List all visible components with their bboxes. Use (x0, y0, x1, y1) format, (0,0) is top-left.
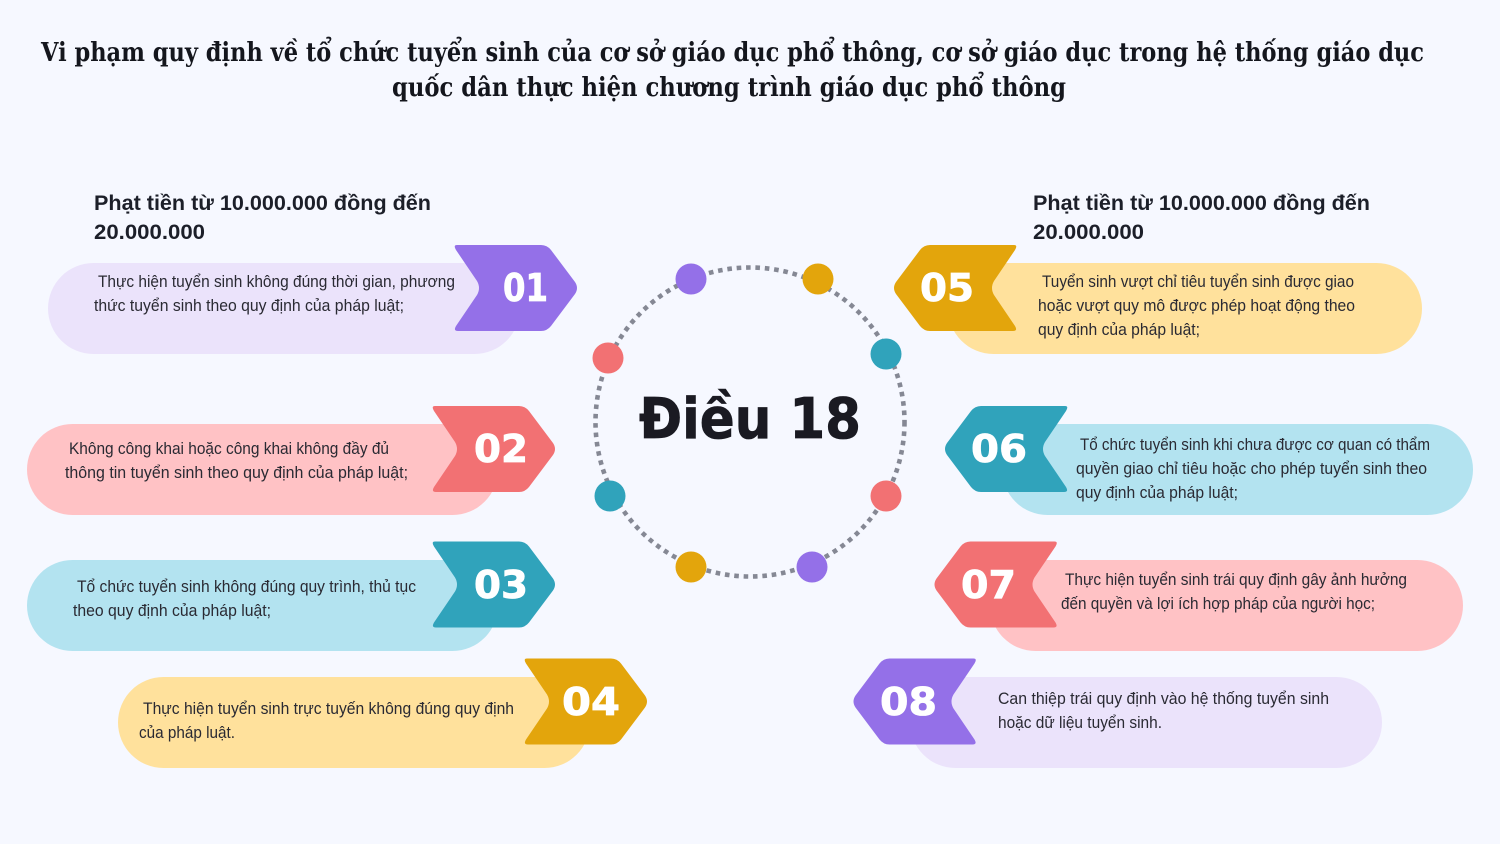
item 01: 01 (503, 266, 548, 310)
item 06: quy định của pháp luật; (1076, 483, 1238, 502)
item 05: quy định của pháp luật; (1038, 320, 1200, 339)
heading: left fine: 20.000.000 (94, 221, 205, 244)
title: quốc dân thực hiện chương trình giáo dục phổ thông (392, 71, 1066, 103)
item 05 (894, 245, 1422, 354)
item 06: quyền giao chỉ tiêu hoặc cho phép tuyển sinh theo (1076, 459, 1427, 478)
item 03 (27, 542, 555, 651)
item 01 (48, 245, 577, 354)
item 05: 05 (920, 266, 974, 310)
item 06: 06 (971, 427, 1027, 471)
item 04 (118, 658, 647, 768)
item 02: Không công khai hoặc công khai không đầy đủ (69, 439, 389, 458)
item 08 (854, 658, 1382, 768)
item 04: của pháp luật. (139, 723, 235, 742)
item 03: 03 (474, 563, 528, 607)
item 02 (27, 406, 555, 515)
item 07: 07 (961, 563, 1016, 607)
item 08: 08 (880, 680, 937, 724)
heading: right fine: 20.000.000 (1033, 221, 1144, 244)
item 08: hoặc dữ liệu tuyển sinh. (998, 713, 1162, 732)
item 07 (934, 542, 1463, 651)
center label: Điều 18 (639, 387, 861, 452)
item 08: Can thiệp trái quy định vào hệ thống tuyển sinh (998, 689, 1329, 708)
item 04: Thực hiện tuyển sinh trực tuyến không đúng quy định (143, 699, 514, 718)
item 05: Tuyển sinh vượt chỉ tiêu tuyển sinh được giao (1042, 272, 1354, 291)
central dotted ring (592, 264, 904, 582)
heading: right fine (1033, 192, 1370, 244)
heading: left fine (94, 192, 431, 244)
item 02: 02 (474, 427, 528, 471)
title (40, 36, 1424, 103)
item 07: đến quyền và lợi ích hợp pháp của người học; (1061, 594, 1375, 613)
item 05: hoặc vượt quy mô được phép hoạt động theo (1038, 296, 1355, 315)
heading: left fine: Phạt tiền từ 10.000.000 đồng đến (94, 192, 431, 215)
item 06 (945, 406, 1473, 515)
item 04: 04 (562, 680, 620, 724)
item 07: Thực hiện tuyển sinh trái quy định gây ảnh hưởng (1065, 570, 1407, 589)
item 02: thông tin tuyển sinh theo quy định của pháp luật; (65, 463, 408, 482)
heading: right fine: Phạt tiền từ 10.000.000 đồng đến (1033, 192, 1370, 215)
item 01: Thực hiện tuyển sinh không đúng thời gian, phương (98, 272, 455, 291)
item 01: thức tuyển sinh theo quy định của pháp luật; (94, 296, 404, 315)
item 06: Tổ chức tuyển sinh khi chưa được cơ quan có thẩm (1080, 435, 1430, 454)
item 03: theo quy định của pháp luật; (73, 601, 271, 620)
item 03: Tổ chức tuyển sinh không đúng quy trình, thủ tục (77, 577, 416, 596)
